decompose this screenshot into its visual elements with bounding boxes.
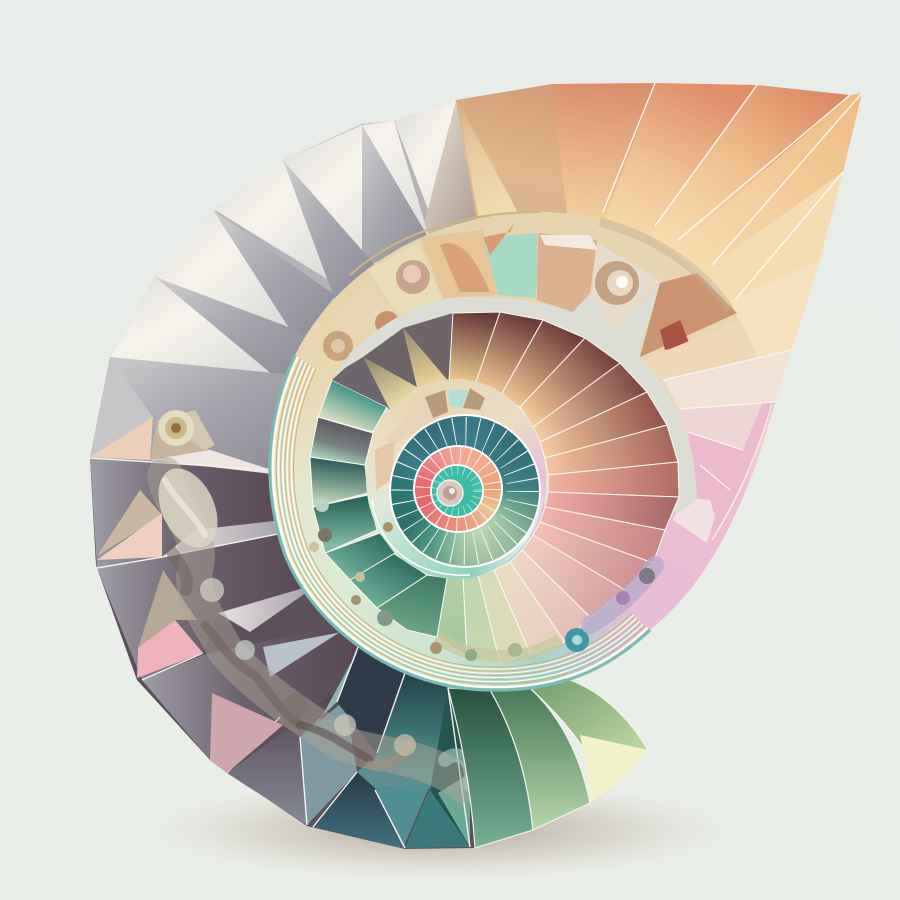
inner teal spokes <box>436 470 478 512</box>
outer whorl: grey and white folded wedges <box>90 100 480 480</box>
light grey inner rim with spikes <box>334 283 697 512</box>
main fan chamber wedges <box>310 312 679 663</box>
salmon ring spokes <box>424 455 492 523</box>
shell backing: upper grey <box>90 100 480 480</box>
band stripes <box>270 355 650 690</box>
inner teal whorl <box>431 465 483 517</box>
scroll swirl on the left <box>157 410 215 450</box>
bottom green lobe fins <box>448 678 648 848</box>
peach, pink and tan panels on the left wedges <box>90 417 283 773</box>
pebbles and swirls along the chamber edge <box>309 498 655 661</box>
outer whorl: peach and orange wedges <box>456 83 862 380</box>
spiral core <box>437 480 463 506</box>
shell backing: lower dark <box>90 458 475 849</box>
outer whorl: dark lower-left wedges <box>90 450 470 848</box>
translucent ribbon of swirls across the dark wedges <box>147 459 471 785</box>
teal ring shading and spokes <box>391 416 539 566</box>
nautilus shell illustration <box>90 83 862 874</box>
small band panels <box>372 388 485 575</box>
right pale and pink wedges <box>663 350 792 543</box>
ground shadow <box>120 775 760 885</box>
illustrated panels in the band <box>323 212 753 380</box>
main spiral band <box>271 212 775 689</box>
pale light bands between folds <box>150 450 272 474</box>
